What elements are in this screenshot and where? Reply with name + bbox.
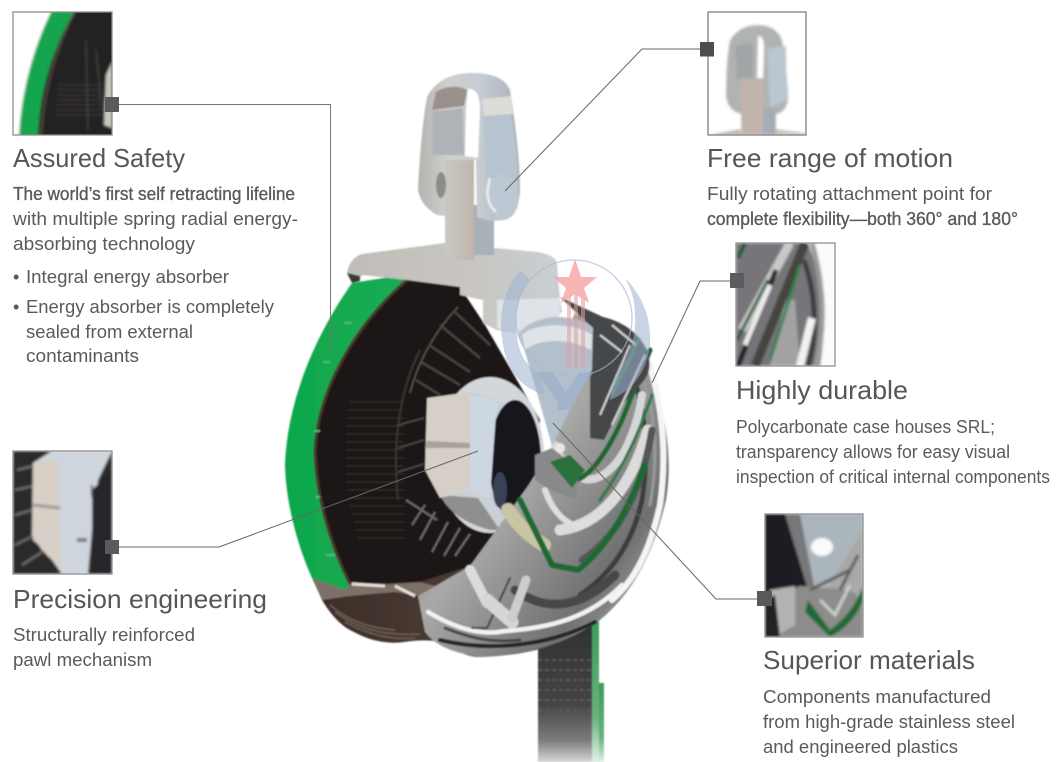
description: absorbing technology — [13, 234, 195, 254]
leader line: highly durable — [652, 281, 730, 383]
leader line: precision engineering — [119, 451, 478, 547]
description: pawl mechanism — [13, 650, 152, 670]
panel: free range of motion — [700, 12, 1018, 229]
bullet list: Energy absorber is completely — [26, 297, 274, 317]
bullet list: • — [13, 297, 19, 317]
marker square — [757, 591, 772, 606]
bullet list — [13, 267, 274, 366]
bullet list: • — [13, 267, 19, 287]
webbing wrap lines — [346, 307, 490, 556]
description: with multiple spring radial energy- — [12, 209, 298, 229]
panel: superior materials — [757, 514, 1015, 757]
case highlights — [428, 340, 663, 646]
panel: precision engineering — [13, 451, 267, 670]
crumpled top of case — [560, 297, 650, 440]
heading: Precision engineering — [13, 584, 267, 614]
thumbnail: stainless components close-up — [765, 514, 863, 637]
bullet list: Integral energy absorber — [26, 267, 229, 287]
description: complete flexibility—both 360° and 180° — [707, 209, 1018, 229]
thumbnail: polycarbonate case close-up — [736, 243, 835, 366]
pawl block — [425, 392, 478, 498]
heading: Free range of motion — [707, 143, 953, 173]
description: Structurally reinforced — [13, 625, 195, 645]
watermark — [501, 259, 650, 410]
black drum — [315, 279, 540, 584]
description — [12, 184, 298, 254]
marker square — [700, 42, 714, 56]
description — [707, 184, 1018, 229]
marker square — [730, 273, 744, 288]
description — [13, 625, 195, 670]
description: from high-grade stainless steel — [763, 712, 1015, 732]
heading: Superior materials — [763, 645, 975, 675]
heading: Highly durable — [736, 375, 908, 405]
panel: highly durable — [730, 243, 1050, 487]
torn edge — [312, 568, 470, 600]
silver hub ring — [436, 377, 544, 533]
description: and engineered plastics — [763, 737, 958, 757]
bullet list: contaminants — [26, 346, 139, 366]
marker square — [105, 540, 119, 554]
description — [763, 687, 1015, 757]
leader line: superior materials — [553, 423, 757, 599]
description — [736, 417, 1050, 487]
illustration: cutaway self retracting lifeline device — [285, 73, 669, 762]
green outer rim — [285, 277, 407, 598]
leader line: assured safety — [119, 104, 330, 350]
dark hub — [489, 400, 541, 520]
description: The world’s first self retracting lifeline — [13, 184, 295, 204]
thumbnail: pawl close-up — [13, 451, 112, 574]
mechanism centre — [535, 448, 580, 500]
mounting plate and skirt — [347, 243, 562, 347]
description: Polycarbonate case houses SRL; — [736, 417, 995, 437]
thumbnail: shackle close-up — [708, 12, 806, 135]
blue stem point — [520, 317, 593, 446]
stem — [445, 160, 494, 260]
webbing strap — [538, 615, 604, 762]
clear case — [418, 314, 669, 657]
description: Components manufactured — [763, 687, 991, 707]
bullet list: sealed from external — [26, 322, 193, 342]
description: Fully rotating attachment point for — [707, 184, 992, 204]
rotating shackle — [418, 73, 520, 221]
heading: Assured Safety — [13, 143, 185, 173]
lower torn housing — [310, 560, 590, 657]
description: inspection of critical internal components — [736, 467, 1050, 487]
green chevrons inside case — [520, 350, 652, 570]
description: transparency allows for easy visual — [736, 442, 1010, 462]
leader line: free range of motion — [505, 49, 700, 191]
thumbnail: green rim close-up — [13, 10, 115, 137]
panel: assured safety — [12, 10, 298, 366]
marker square — [105, 97, 119, 112]
